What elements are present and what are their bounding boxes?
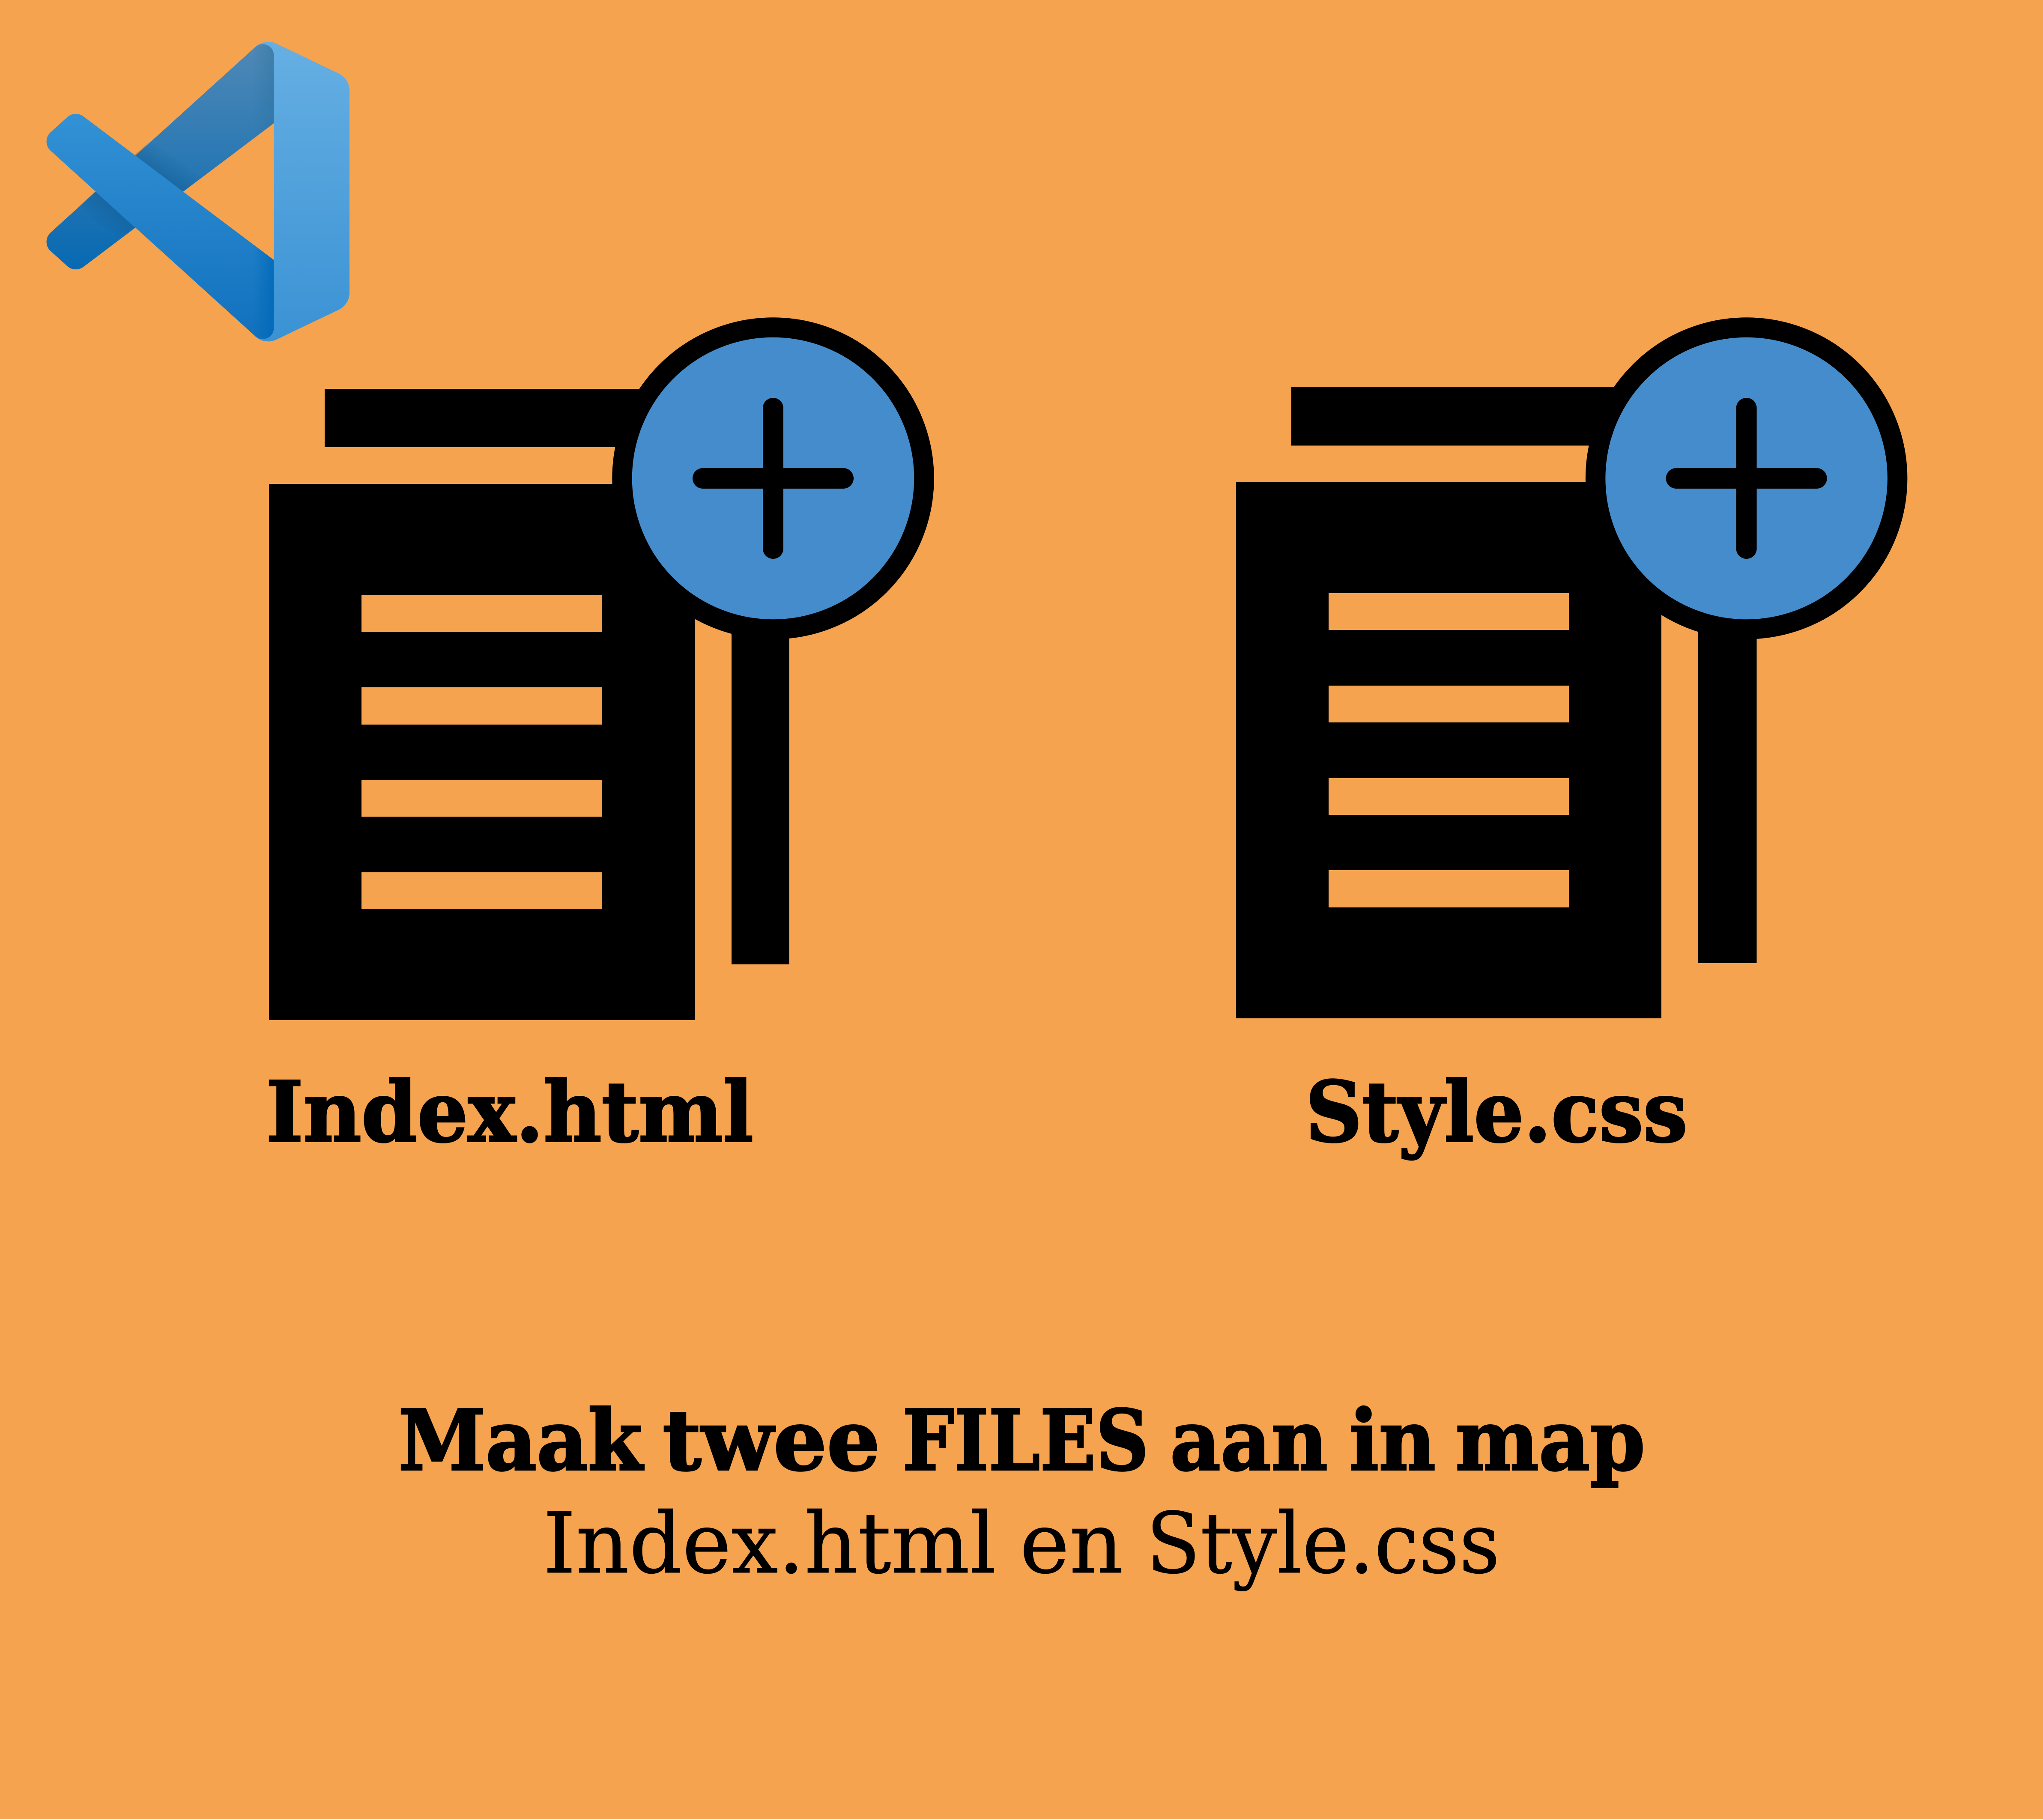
panel: Style.css new file icon <box>1236 327 1897 1018</box>
magnifier lens <box>1595 327 1897 630</box>
heading: Maak <box>398 1391 644 1489</box>
subheading: Index.html <box>543 1495 996 1593</box>
heading <box>398 1391 1645 1489</box>
label: Index.html: Index.html <box>266 1063 753 1161</box>
heading: map <box>1455 1391 1645 1489</box>
document body <box>269 484 695 1020</box>
document tab bar <box>1291 387 1720 445</box>
document tab bar <box>325 389 753 447</box>
magnifier handle <box>732 600 789 964</box>
document text lines <box>361 595 602 909</box>
heading: in <box>1349 1391 1436 1489</box>
logo: back arm <box>47 42 339 269</box>
document body <box>1236 482 1661 1018</box>
logo: right panel <box>255 42 349 341</box>
heading: FILES <box>902 1391 1149 1489</box>
subheading: en <box>1020 1495 1123 1593</box>
magnifier lens <box>622 327 924 630</box>
document text lines <box>1329 593 1569 907</box>
magnifier handle <box>1698 600 1757 963</box>
label: Style.css: Style.css <box>1305 1063 1688 1161</box>
icon: Visual Studio Code logo <box>47 42 349 341</box>
heading: twee <box>663 1391 880 1489</box>
heading: aan <box>1170 1391 1328 1489</box>
subheading <box>543 1495 1500 1593</box>
plus sign <box>1676 408 1817 549</box>
panel: Index.html new file icon <box>269 327 924 1020</box>
subheading: Style.css <box>1146 1495 1500 1593</box>
logo: front arm <box>47 114 339 341</box>
plus sign <box>703 408 843 549</box>
